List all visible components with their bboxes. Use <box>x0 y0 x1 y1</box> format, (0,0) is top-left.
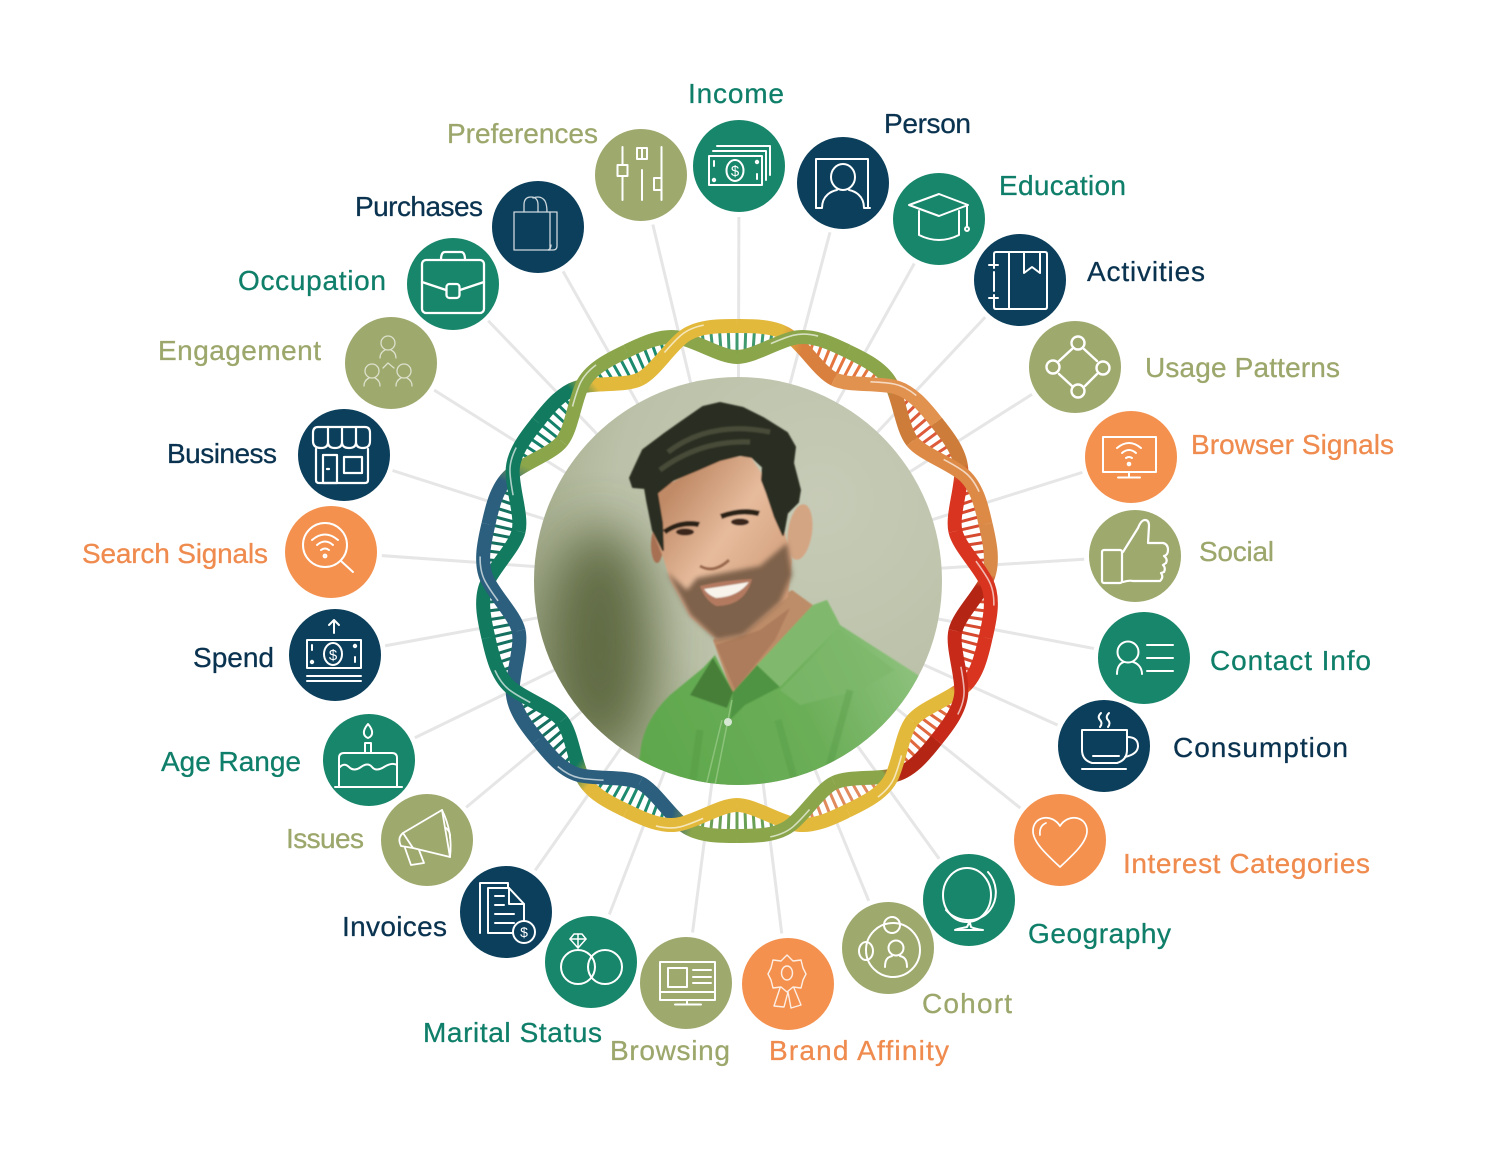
DNA ring <box>476 318 998 844</box>
DNA rungs <box>476 326 998 836</box>
label: Occupation: Occupation <box>238 265 386 296</box>
label: Invoices: Invoices <box>342 911 447 942</box>
icon: cohort <box>842 902 934 994</box>
label: Engagement: Engagement <box>158 335 321 366</box>
icon: person <box>797 137 889 229</box>
spokes from photo to icons <box>331 166 1144 984</box>
mouth <box>700 579 752 606</box>
icon: consumption <box>1058 700 1150 792</box>
label: Usage Patterns: Usage Patterns <box>1145 352 1340 383</box>
neck <box>713 590 814 698</box>
label: Social: Social <box>1199 536 1274 567</box>
label: Income: Income <box>688 78 784 109</box>
hair <box>630 403 800 550</box>
label: Marital Status: Marital Status <box>423 1017 602 1048</box>
icon: income: $ <box>731 163 740 180</box>
eyes <box>676 528 694 536</box>
DNA under strands <box>483 321 991 841</box>
icon: income <box>693 120 785 212</box>
icon: occupation <box>407 238 499 330</box>
icon: browsing <box>640 937 732 1029</box>
label: Activities: Activities <box>1087 256 1205 287</box>
beard <box>667 543 792 640</box>
icon: preferences <box>595 129 687 221</box>
icon: invoices: $ <box>520 924 528 940</box>
label: Browser Signals: Browser Signals <box>1191 429 1394 460</box>
label: Purchases: Purchases <box>355 191 483 222</box>
label: Contact Info: Contact Info <box>1210 645 1371 676</box>
label: Geography: Geography <box>1028 918 1171 949</box>
icon: activities <box>974 234 1066 326</box>
label: Business: Business <box>167 438 277 469</box>
icon: marital status <box>545 916 637 1008</box>
icon: social <box>1089 510 1181 602</box>
icon: age range <box>323 714 415 806</box>
label: Preferences: Preferences <box>447 118 598 149</box>
icon: brand affinity <box>742 938 834 1030</box>
label: Brand Affinity: Brand Affinity <box>769 1035 949 1066</box>
label: Consumption: Consumption <box>1173 732 1348 763</box>
label: Spend: Spend <box>193 642 274 673</box>
portrait photo <box>530 370 950 800</box>
icon: interest categories <box>1014 794 1106 886</box>
label: Age Range: Age Range <box>161 746 301 777</box>
label: Education: Education <box>999 170 1126 201</box>
nose <box>700 560 729 569</box>
icon: invoices <box>460 866 552 958</box>
label: Person: Person <box>884 108 971 139</box>
icon: contact info <box>1098 612 1190 704</box>
icon: business <box>298 409 390 501</box>
icon: search signals <box>285 506 377 598</box>
label: Cohort: Cohort <box>922 988 1012 1019</box>
icon: issues <box>381 794 473 886</box>
icon: education <box>893 173 985 265</box>
icon: engagement <box>345 317 437 409</box>
eyebrows <box>663 521 700 534</box>
shirt <box>638 624 918 785</box>
label: Interest Categories: Interest Categories <box>1123 848 1370 879</box>
label: Search Signals: Search Signals <box>82 538 268 569</box>
icon: usage patterns <box>1029 321 1121 413</box>
face <box>653 456 792 640</box>
DNA over strands <box>480 318 994 844</box>
icon: geography <box>923 854 1015 946</box>
icon: browser signals <box>1085 411 1177 503</box>
label: Browsing: Browsing <box>610 1035 730 1066</box>
ears <box>787 504 813 560</box>
gaps between spokes and icons <box>280 115 1195 1035</box>
icon: purchases <box>492 181 584 273</box>
icon: spend: $ <box>329 647 338 664</box>
label: Issues: Issues <box>286 823 364 854</box>
icon: spend <box>289 609 381 701</box>
